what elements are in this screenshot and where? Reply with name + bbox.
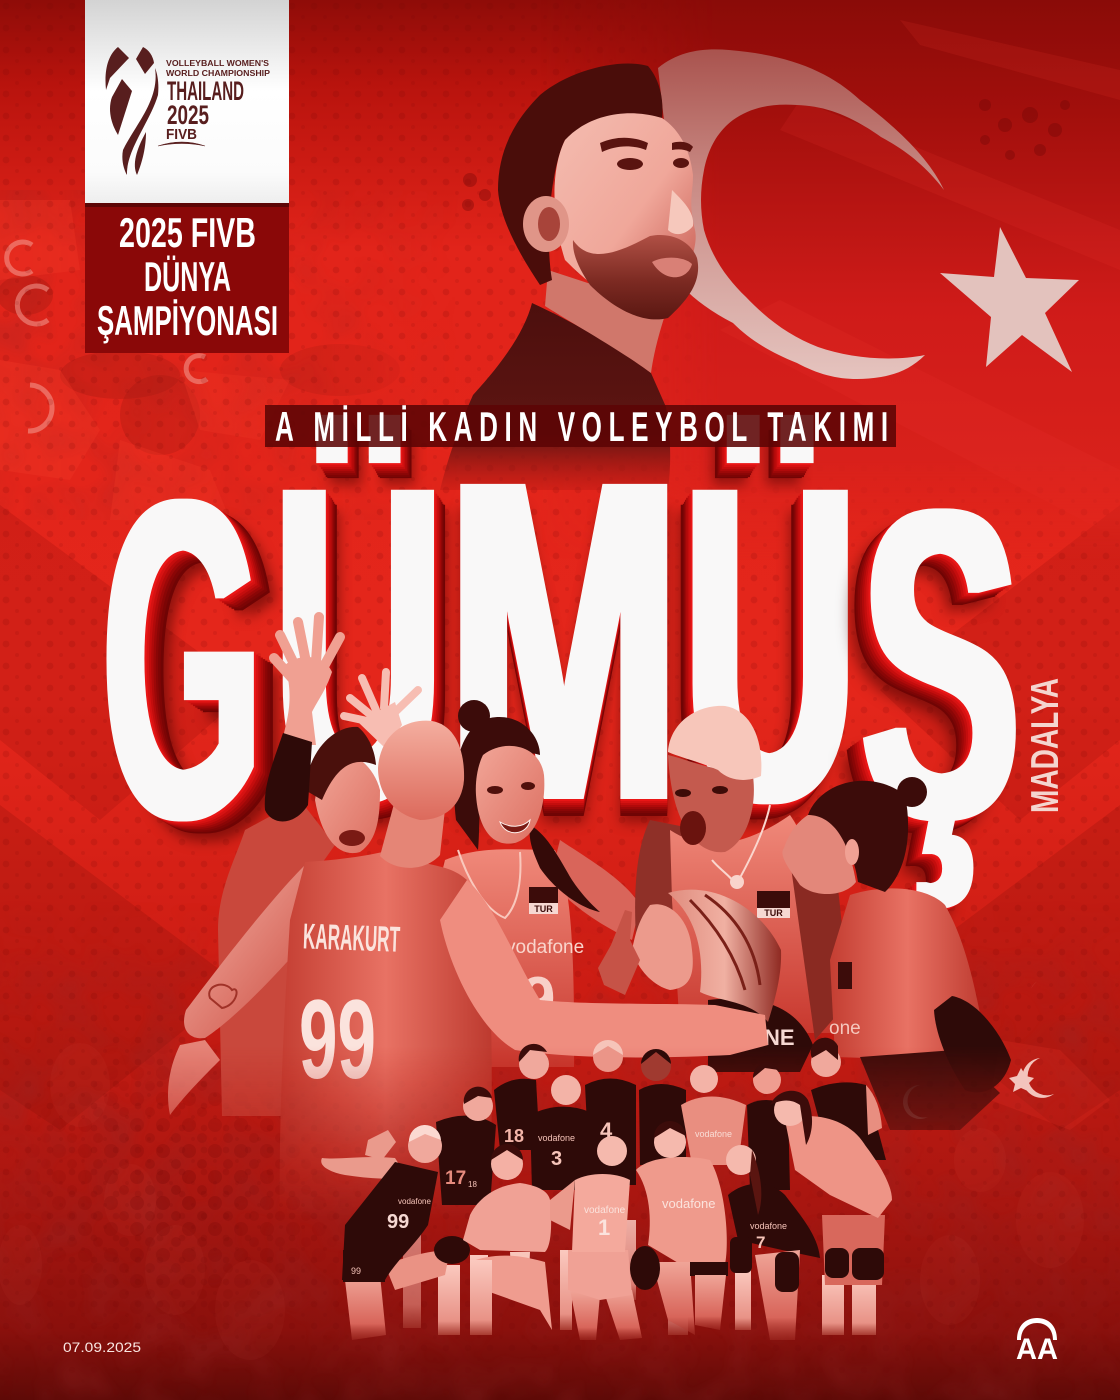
player left: raised hand and body bbox=[218, 617, 418, 1116]
logo wordmark bbox=[166, 58, 270, 143]
legs bbox=[345, 1275, 386, 1340]
player back right bbox=[747, 1063, 790, 1190]
goalkeeper big player bbox=[630, 1121, 728, 1335]
white hair jersey bbox=[670, 815, 835, 1033]
second raised hand bbox=[344, 672, 418, 722]
bottom crowd figures bbox=[0, 1043, 1084, 1360]
kneeling player 7 bbox=[726, 1145, 820, 1340]
letter M: M bbox=[447, 385, 680, 897]
center jersey bbox=[440, 849, 574, 1067]
player blonde front bbox=[598, 890, 813, 1072]
second palm bbox=[358, 702, 402, 748]
bald player head bbox=[378, 721, 464, 820]
goalkeeper 1 player: 1 bbox=[598, 1215, 610, 1240]
palm and forearm bbox=[282, 657, 332, 745]
five players group bbox=[168, 617, 1011, 1220]
logo wordmark: THAILAND bbox=[167, 76, 244, 106]
kneeling player 99 bbox=[321, 1125, 470, 1340]
player 4 bbox=[585, 1040, 636, 1185]
white hair tattooed arm bbox=[635, 820, 682, 965]
goalkeeper 1 player: vodafone bbox=[584, 1205, 626, 1216]
agency logo AA bbox=[1016, 1318, 1058, 1366]
halftone dots on the flag bbox=[462, 99, 1070, 211]
pointing hand bbox=[598, 910, 640, 995]
player 3 bbox=[530, 1075, 590, 1190]
center face bbox=[476, 746, 544, 844]
white hair body shadow bbox=[792, 872, 842, 1040]
white hair bbox=[668, 706, 761, 780]
coach nose bbox=[668, 190, 693, 234]
necklace with pendant bbox=[712, 805, 770, 885]
number: 99 bbox=[387, 1211, 409, 1233]
player 18 bbox=[494, 1044, 549, 1150]
crowd texture: bottom bbox=[0, 974, 1104, 1400]
coach beard bbox=[573, 235, 698, 319]
letter G: G bbox=[102, 404, 263, 914]
left player hair bbox=[305, 727, 376, 800]
eyes and smile bbox=[487, 782, 535, 794]
center number: 9 bbox=[521, 965, 555, 1034]
player 17: 17 bbox=[445, 1168, 466, 1189]
halftone lower left bbox=[80, 1094, 272, 1261]
player 17: 18 bbox=[468, 1180, 477, 1189]
shorts number: 99 bbox=[351, 1266, 361, 1276]
logo swoosh bbox=[158, 142, 205, 146]
knee pad bbox=[434, 1236, 470, 1264]
player 3: vodafone bbox=[538, 1133, 575, 1143]
hair bun bbox=[458, 700, 490, 732]
vodafone sponsor: vodafone bbox=[506, 937, 584, 958]
bald player back bbox=[168, 721, 768, 1220]
sponsor right: one bbox=[829, 1018, 861, 1039]
team group photo bbox=[321, 1038, 892, 1340]
championship label bbox=[85, 203, 289, 353]
left player mouth bbox=[339, 830, 365, 846]
TUR badge bbox=[529, 887, 558, 914]
flag bbox=[598, 12, 1120, 524]
player jacket center left bbox=[463, 1144, 552, 1335]
coach neck bbox=[545, 270, 668, 373]
center player hair bbox=[454, 717, 540, 850]
bald player right arm bbox=[440, 880, 768, 1057]
sponsor: vodafone bbox=[398, 1197, 431, 1206]
right player face bbox=[782, 815, 856, 894]
left player body bbox=[218, 800, 335, 1116]
player jacket right bbox=[770, 1091, 892, 1218]
hair top bun bbox=[897, 777, 927, 807]
player 3: 3 bbox=[551, 1148, 562, 1170]
coach shirt bbox=[440, 303, 670, 490]
right player black sleeve bbox=[934, 996, 1011, 1092]
subtitle bar: A MİLLİ KADIN VOLEYBOL TAKIMI bbox=[275, 404, 888, 451]
letter S cedilla: Ş bbox=[861, 417, 1020, 911]
player 4: 4 bbox=[600, 1118, 613, 1143]
vertical label madalya: MADALYA bbox=[1024, 678, 1067, 813]
championship label: 2025 FIVB bbox=[119, 209, 256, 256]
flag folds bbox=[780, 20, 1120, 182]
coach face bbox=[554, 113, 696, 306]
goalkeeper 1 player bbox=[550, 1136, 642, 1340]
bald player torso bbox=[280, 848, 492, 1220]
bald player back: KARAKURT bbox=[302, 915, 401, 960]
left player face bbox=[315, 752, 380, 853]
date: 07.09.2025 bbox=[63, 1339, 141, 1355]
left crowd flags bbox=[0, 200, 290, 520]
kneeling player 7: 7 bbox=[756, 1233, 765, 1252]
player salmon back bbox=[681, 1065, 746, 1165]
coach mouth bbox=[652, 258, 692, 277]
pendant bbox=[730, 875, 744, 889]
blonde shirt bbox=[708, 998, 813, 1072]
letter U second with dots: Ü bbox=[683, 392, 858, 896]
right player side badges bbox=[838, 962, 852, 989]
eyes bbox=[675, 786, 728, 797]
flag crescent bbox=[658, 49, 944, 379]
jersey number 99: 99 bbox=[299, 977, 376, 1102]
tattoo bbox=[209, 985, 237, 1008]
logo wordmark: WORLD CHAMPIONSHIP bbox=[166, 68, 270, 78]
logo wordmark: FIVB bbox=[166, 126, 197, 143]
center player right arm bbox=[550, 840, 640, 940]
player dark hair bbox=[639, 1049, 686, 1165]
back row players bbox=[436, 1038, 886, 1205]
blonde hair streaks bbox=[690, 895, 760, 990]
player right bbox=[782, 777, 1011, 1130]
player top right bbox=[811, 1038, 886, 1160]
body bbox=[342, 1162, 438, 1280]
TUR badge right bbox=[757, 891, 790, 918]
necklace bbox=[458, 850, 520, 918]
blonde sponsor letters: NE bbox=[764, 1025, 795, 1050]
TUR badge: TUR bbox=[534, 904, 553, 914]
player 18: 18 bbox=[504, 1126, 524, 1146]
crowd flags right bbox=[903, 980, 1110, 1130]
smile bbox=[500, 820, 530, 833]
head bbox=[408, 1129, 442, 1163]
bald player neck bbox=[380, 800, 446, 868]
player white hair bbox=[635, 706, 850, 1040]
coach ear bbox=[523, 196, 569, 252]
arm raised bbox=[321, 1157, 408, 1179]
right player shorts bbox=[860, 1050, 1000, 1130]
volleyball figure mark bbox=[106, 47, 158, 175]
blonde face bbox=[632, 904, 693, 990]
flag star bbox=[940, 227, 1079, 372]
player 17 bbox=[436, 1087, 496, 1205]
kneeling player 7: vodafone bbox=[750, 1221, 787, 1231]
left hand low bbox=[168, 1040, 220, 1115]
letter U with dots: Ü bbox=[273, 392, 444, 896]
player center with braid bbox=[440, 700, 640, 1067]
championship label: ŞAMPİYONASI bbox=[97, 297, 278, 344]
right player ear bbox=[845, 839, 859, 865]
crowd crescents left bbox=[7, 242, 207, 431]
logo wordmark: 2025 bbox=[167, 100, 209, 130]
braid bbox=[530, 825, 600, 912]
open mouth bbox=[680, 811, 706, 845]
blonde hair bbox=[668, 890, 781, 1022]
player salmon back: vodafone bbox=[695, 1129, 732, 1139]
coach eyes and brows bbox=[600, 138, 648, 152]
back row legs bbox=[403, 1210, 885, 1335]
white hair face bbox=[668, 755, 754, 852]
agency logo AA: AA bbox=[1016, 1333, 1058, 1366]
shorts bbox=[343, 1250, 385, 1282]
crowd texture: left bbox=[0, 190, 400, 520]
coach hair bbox=[498, 64, 662, 285]
logo panel bbox=[85, 0, 289, 203]
raised hand fingers bbox=[274, 617, 340, 678]
left crowd figures bbox=[0, 275, 400, 455]
background diamonds bbox=[0, 505, 1120, 1130]
black arm sleeve bbox=[265, 733, 312, 821]
bald player left arm bbox=[184, 865, 320, 1038]
goalkeeper big player: vodafone bbox=[662, 1196, 716, 1211]
right player jersey bbox=[830, 888, 985, 1060]
right player hair bbox=[808, 781, 908, 892]
championship label: DÜNYA bbox=[144, 253, 231, 300]
TUR badge right: TUR bbox=[764, 908, 783, 918]
logo wordmark: VOLLEYBALL WOMEN'S bbox=[166, 58, 269, 68]
